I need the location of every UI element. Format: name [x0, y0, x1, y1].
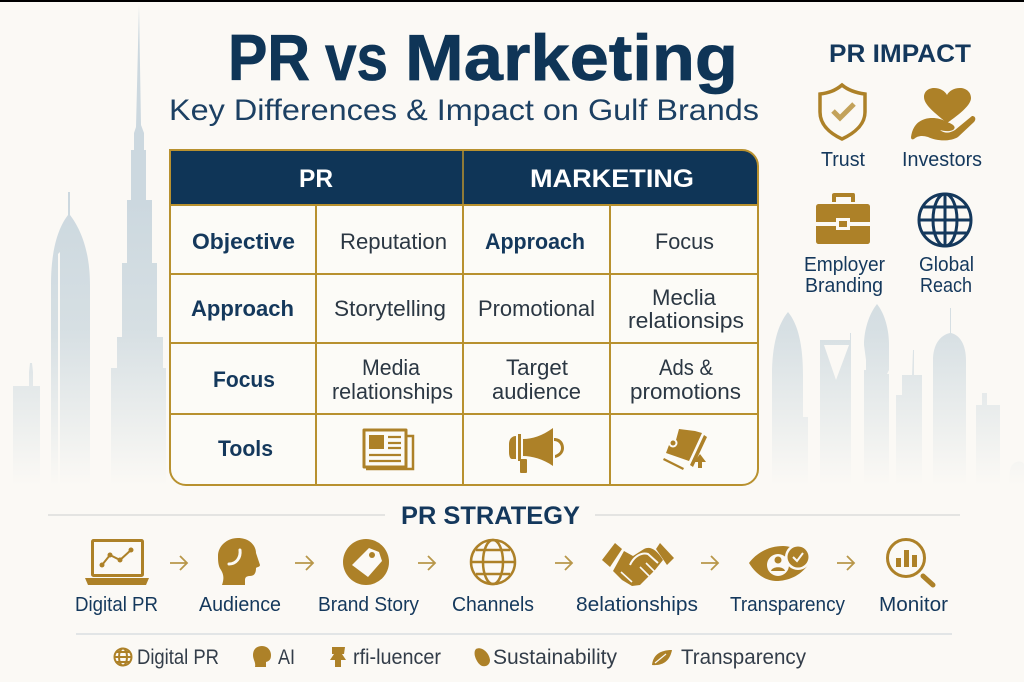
icon: eye with check — [749, 544, 811, 581]
table header: PR — [299, 165, 333, 193]
title: Marketing — [405, 21, 738, 94]
step: brand story — [318, 539, 419, 616]
row: focus: relationships — [332, 379, 453, 404]
heading: PR impact: PR IMPACT — [829, 40, 971, 68]
row: objective: Objective — [192, 229, 295, 254]
trend: influencer: rfi-luencer — [353, 646, 441, 669]
label: investors: Investors — [902, 149, 982, 171]
icon: newspaper — [364, 430, 413, 469]
row: objective: Reputation — [340, 229, 447, 254]
arrow — [295, 556, 313, 570]
background skyline — [13, 5, 1024, 490]
icon: head — [218, 538, 260, 585]
arrow — [837, 556, 854, 570]
row: approach: Meclia — [652, 285, 717, 310]
row: focus: Media — [362, 355, 421, 380]
step: transparency: Transparency — [730, 594, 845, 616]
row: focus — [213, 355, 741, 404]
icon: megaphone — [509, 428, 564, 473]
arrow — [418, 556, 435, 570]
trend: AI: AI — [278, 646, 295, 669]
row: objective: Approach — [485, 229, 585, 254]
label: global reach — [919, 254, 974, 297]
icon: tag — [343, 539, 389, 585]
row: focus: audience — [492, 379, 581, 404]
subtitle: Key Differences & Impact on Gulf Brands — [169, 94, 759, 127]
row: tools: Tools — [218, 436, 273, 461]
panel: comparison table — [170, 150, 758, 485]
label: employer branding — [804, 254, 885, 297]
row: approach: Promotional — [478, 296, 595, 321]
icon: globe — [919, 194, 971, 246]
step: audience — [199, 538, 281, 616]
step: relationships: 8elationships — [576, 594, 698, 616]
row: approach — [191, 285, 744, 333]
step: monitor: Monitor — [879, 594, 948, 616]
row: focus: Focus — [213, 367, 275, 392]
step: channels — [452, 540, 534, 616]
icon: shield — [820, 85, 865, 139]
table header — [170, 150, 758, 205]
row: focus: promotions — [630, 379, 741, 404]
arrow — [701, 556, 718, 570]
icon: magnifier — [888, 540, 933, 585]
step: digital PR: Digital PR — [75, 594, 158, 616]
row: focus: Target — [506, 355, 568, 380]
step: transparency — [730, 544, 845, 616]
row: approach: Approach — [191, 296, 294, 321]
row: objective: Focus — [655, 229, 714, 254]
icon: heart in hand — [911, 88, 975, 140]
trend: sustainability: Sustainability — [493, 646, 618, 669]
panel: PR strategy — [48, 502, 960, 634]
label: trust: Trust — [821, 149, 865, 171]
icon: ads and promotions — [663, 429, 707, 470]
label: employer branding: Employer — [804, 254, 885, 276]
table header: MARKETING — [530, 165, 694, 193]
row: tools — [218, 428, 707, 473]
title — [228, 21, 738, 94]
row: objective — [192, 229, 714, 254]
step: channels: Channels — [452, 594, 534, 616]
arrow — [170, 556, 187, 570]
step: relationships — [576, 543, 698, 616]
step: audience: Audience — [199, 594, 281, 616]
icon: handshake — [602, 543, 674, 586]
title: PR — [228, 21, 310, 94]
title: vs — [325, 21, 388, 94]
label: global reach: Reach — [920, 275, 972, 297]
step: monitor — [879, 540, 948, 616]
label: global reach: Global — [919, 254, 974, 276]
label: employer branding: Branding — [805, 275, 883, 297]
panel: trends strip — [114, 646, 806, 669]
row: focus: Ads & — [659, 355, 713, 380]
heading: PR strategy: PR STRATEGY — [401, 502, 580, 530]
step: brand story: Brand Story — [318, 594, 419, 616]
icon: globe — [471, 540, 515, 584]
step: digital PR — [75, 540, 158, 616]
row: approach: relationsips — [628, 308, 744, 333]
icon: laptop chart — [85, 540, 149, 585]
trend: digital PR: Digital PR — [137, 646, 219, 669]
trend: transparency: Transparency — [681, 646, 806, 669]
arrow — [555, 556, 572, 570]
panel: PR impact — [804, 40, 982, 297]
trend: AI — [253, 646, 295, 669]
row: approach: Storytelling — [334, 296, 446, 321]
icon: briefcase — [816, 193, 870, 244]
